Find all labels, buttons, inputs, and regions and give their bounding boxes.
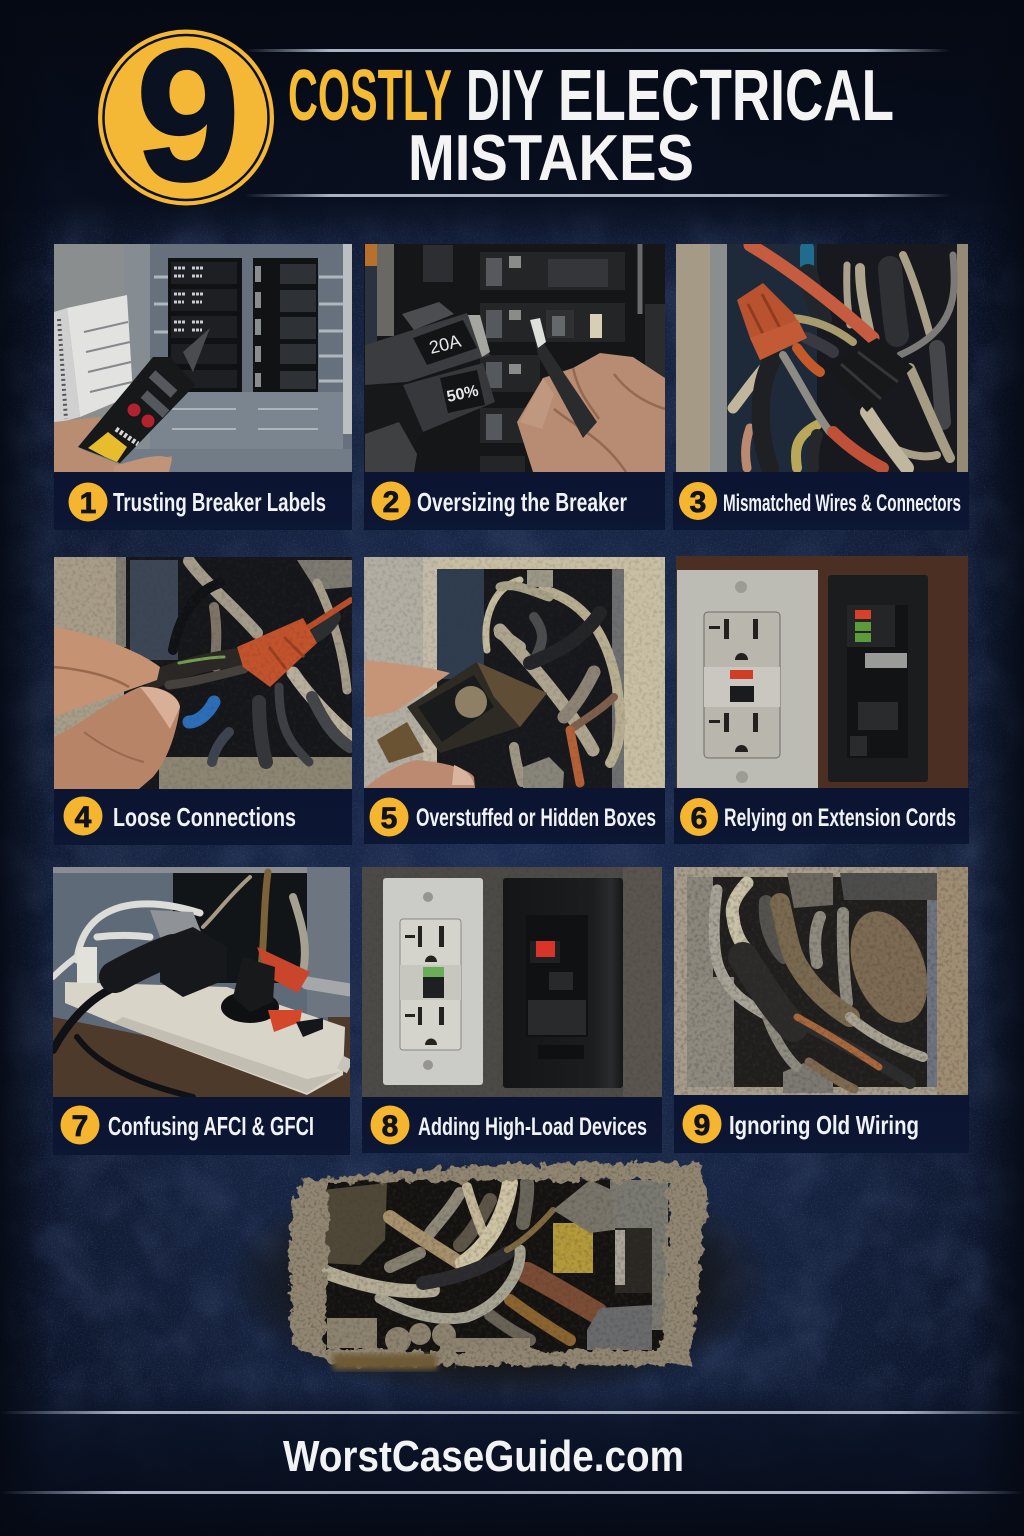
caption text: Adding High-Load Devices bbox=[418, 1113, 647, 1141]
photo: crowded box with block connector bbox=[364, 557, 665, 788]
bottom illustration: burnt wall box bbox=[225, 1158, 775, 1402]
photo: GFCI outlets bbox=[676, 556, 968, 788]
photo: oversized breaker and hand: 50% bbox=[445, 383, 480, 406]
number badge 8 bbox=[370, 1106, 410, 1144]
title bbox=[288, 56, 894, 194]
caption text: Loose Connections bbox=[113, 802, 296, 832]
panel 5: overstuffed boxes bbox=[364, 557, 665, 844]
caption bar bbox=[362, 1097, 662, 1153]
caption bar bbox=[53, 1097, 350, 1155]
panel 1: trusting breaker labels bbox=[54, 244, 352, 530]
header rules bbox=[245, 49, 950, 197]
photo: white and black outlets bbox=[362, 867, 662, 1097]
caption bar bbox=[674, 788, 969, 844]
number badge 6 bbox=[680, 798, 718, 836]
panel 4: loose connections bbox=[54, 557, 352, 845]
panel 2: oversizing the breaker bbox=[364, 244, 665, 530]
number badge 2: 2 bbox=[383, 486, 399, 519]
panel 8: high-load devices bbox=[362, 867, 662, 1153]
number badge 5: 5 bbox=[381, 802, 397, 835]
badge: number 9: 9 bbox=[136, 10, 240, 220]
panel 3: mismatched wires bbox=[673, 244, 969, 530]
footer rules bbox=[0, 1411, 1024, 1494]
caption bar bbox=[54, 789, 352, 845]
caption bar bbox=[364, 472, 665, 530]
wires bbox=[320, 1183, 597, 1340]
number badge 4 bbox=[64, 796, 102, 836]
number badge 1: 1 bbox=[80, 487, 96, 520]
number badge 3 bbox=[679, 482, 717, 520]
caption text: Trusting Breaker Labels bbox=[113, 487, 326, 517]
number badge 9: 9 bbox=[694, 1109, 710, 1142]
caption bar bbox=[673, 472, 969, 530]
number badge 3: 3 bbox=[690, 486, 706, 519]
box interior bbox=[323, 1180, 668, 1353]
title: DIY bbox=[466, 56, 544, 136]
scorched wall shadow bbox=[225, 1158, 775, 1402]
panel 7: AFCI and GFCI bbox=[53, 867, 350, 1155]
title: ELECTRICAL bbox=[558, 56, 894, 136]
number badge 6: 6 bbox=[691, 802, 707, 835]
photo: oversized breaker and hand: 20A bbox=[427, 331, 463, 358]
number badge 1 bbox=[68, 482, 108, 522]
photo: oversized breaker and hand bbox=[364, 244, 665, 472]
number badge 8: 8 bbox=[382, 1110, 398, 1143]
caption bar bbox=[674, 1095, 969, 1153]
caption bar bbox=[364, 788, 665, 844]
number badge 5 bbox=[370, 798, 408, 836]
number badge 2 bbox=[372, 482, 410, 520]
caption text: Confusing AFCI & GFCI bbox=[108, 1111, 314, 1141]
caption text: Ignoring Old Wiring bbox=[729, 1110, 919, 1140]
number badge 9 bbox=[682, 1104, 722, 1144]
photo: breaker panel and tester bbox=[54, 244, 352, 472]
plaster frame bbox=[288, 1163, 708, 1366]
caption text: Oversizing the Breaker bbox=[417, 487, 627, 517]
number badge 4: 4 bbox=[75, 801, 92, 834]
badge: number 9 bbox=[98, 10, 274, 220]
panel 9: ignoring old wiring bbox=[674, 867, 969, 1153]
panel 6: extension cords bbox=[674, 556, 969, 844]
caption bar bbox=[54, 472, 352, 530]
number badge 7: 7 bbox=[72, 1110, 88, 1143]
title: COSTLY bbox=[288, 56, 452, 136]
photo: hand holding wire nut bbox=[54, 557, 352, 789]
photo: corroded old wiring bbox=[674, 867, 968, 1095]
photo: power strip with plugs bbox=[53, 867, 350, 1097]
title: MISTAKES bbox=[408, 121, 694, 194]
number badge 7 bbox=[60, 1106, 100, 1144]
footer website: WorstCaseGuide.com bbox=[283, 1432, 684, 1481]
caption text: Overstuffed or Hidden Boxes bbox=[416, 804, 656, 832]
photo: wires and orange wire nut bbox=[676, 244, 968, 472]
